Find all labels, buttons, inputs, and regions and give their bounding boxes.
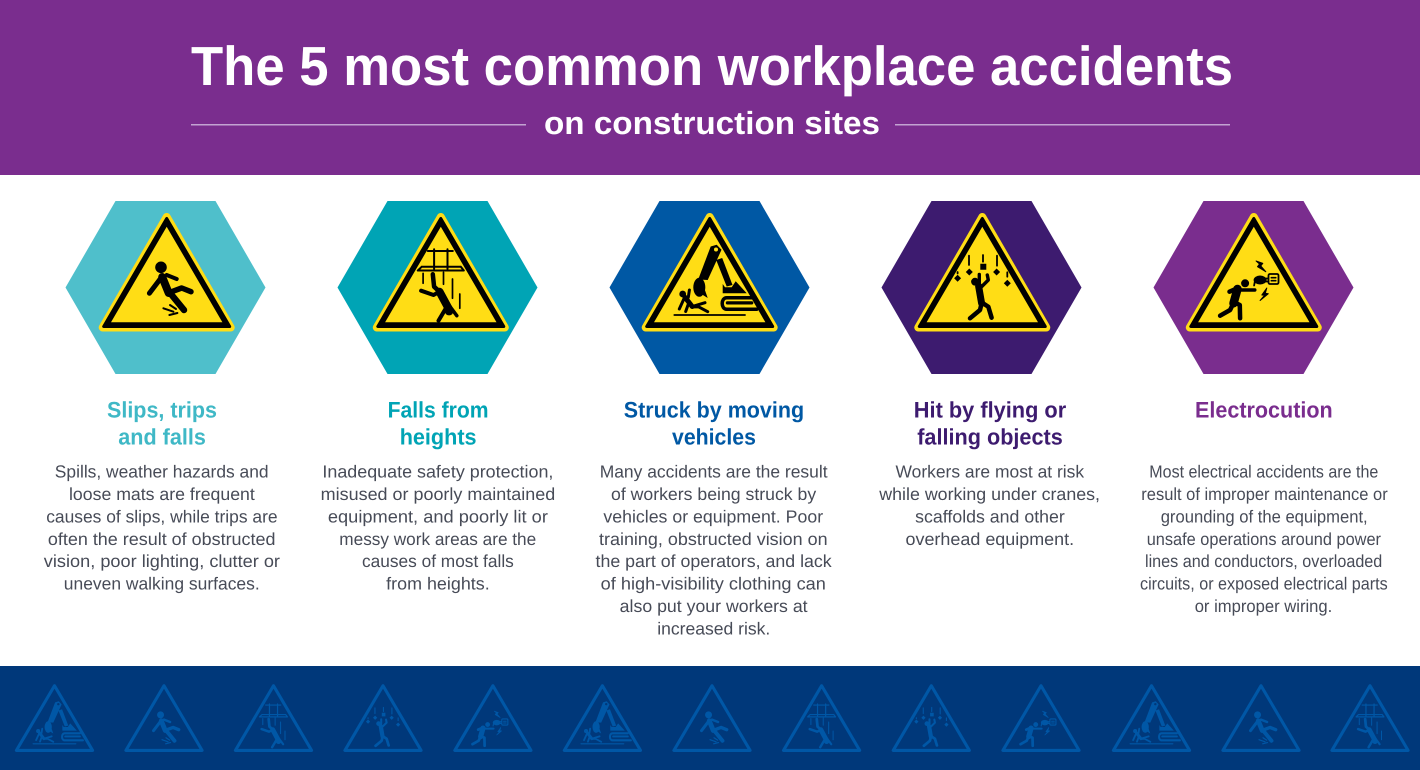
panel: slips, trips and falls [44, 201, 280, 594]
title: The 5 most common workplace accidents [191, 35, 1233, 97]
text: falls description: messy work areas are the [339, 529, 536, 549]
icon: fall hazard hexagon sign [338, 201, 538, 374]
heading: struck: vehicles [672, 424, 756, 450]
panel: hit by flying or falling objects [878, 201, 1100, 549]
text: struck description: training, obstructed vision on [599, 529, 828, 549]
text: slips description: often the result of obstructed [48, 529, 276, 549]
subtitle: on construction sites [544, 105, 880, 141]
text: electrocution description: lines and conductors, overloaded [1145, 551, 1382, 571]
text: slips description: Spills, weather hazards and [55, 462, 269, 482]
header band [0, 0, 1420, 175]
panel: falls from heights [321, 201, 555, 594]
text: struck description [596, 462, 832, 638]
text: slips description: causes of slips, while trips are [46, 506, 278, 526]
text: flying objects description: scaffolds and other [915, 506, 1065, 526]
text: electrocution description [1140, 462, 1388, 616]
text: electrocution description: circuits, or exposed electrical parts [1140, 574, 1388, 594]
text: struck description: of workers being struck by [611, 484, 816, 504]
heading: flying objects: Hit by flying or [914, 398, 1066, 423]
icon: falling objects hexagon sign [882, 201, 1082, 374]
text: struck description: the part of operators, and lack [596, 551, 832, 571]
text: struck description: increased risk. [657, 618, 770, 638]
text: electrocution description: Most electrical accidents are the [1149, 462, 1378, 482]
text: flying objects description: overhead equipment. [906, 529, 1074, 549]
text: slips description: uneven walking surfaces. [64, 574, 260, 594]
heading: struck: Struck by moving [624, 398, 804, 423]
text: struck description: also put your workers at [620, 596, 808, 616]
text: falls description: misused or poorly maintained [321, 484, 555, 504]
heading: slips: and falls [118, 424, 206, 450]
text: falls description [321, 462, 555, 594]
text: electrocution description: or improper wiring. [1195, 596, 1332, 616]
text: flying objects description: Workers are most at risk [896, 462, 1084, 482]
text: electrocution description: result of improper maintenance or [1141, 484, 1388, 504]
heading: slips: Slips, trips [107, 398, 217, 423]
text: flying objects description [878, 462, 1100, 549]
text: falls description: from heights. [386, 574, 490, 594]
heading: falls: Falls from [388, 398, 489, 423]
text: struck description: of high-visibility clothing can [601, 574, 826, 594]
heading: falls: heights [400, 424, 477, 450]
text: struck description: vehicles or equipment. Poor [603, 506, 823, 526]
heading: flying objects: falling objects [917, 424, 1063, 450]
icon: slip hazard hexagon sign [66, 201, 266, 374]
text: flying objects description: while working under cranes, [878, 484, 1100, 504]
icon: excavator hazard hexagon sign [610, 201, 810, 374]
text: struck description: Many accidents are the result [600, 462, 828, 482]
text: falls description: causes of most falls [362, 551, 514, 571]
footer band with hazard icon pattern [0, 666, 1420, 770]
heading: struck [624, 398, 804, 450]
panel: struck by moving vehicles [596, 201, 832, 638]
heading: electrocution: Electrocution [1195, 398, 1333, 423]
text: electrocution description: grounding of the equipment, [1161, 506, 1368, 526]
icon: electric hazard hexagon sign [1154, 201, 1354, 374]
heading: slips [107, 398, 217, 450]
heading: falls [388, 398, 489, 450]
heading: flying objects [914, 398, 1066, 450]
panel: electrocution [1140, 201, 1388, 616]
text: slips description [44, 462, 280, 594]
text: falls description: equipment, and poorly lit or [328, 506, 548, 526]
text: falls description: Inadequate safety protection, [322, 462, 553, 482]
text: electrocution description: unsafe operations around power [1147, 529, 1381, 549]
text: slips description: vision, poor lighting, clutter or [44, 551, 280, 571]
text: slips description: loose mats are frequent [69, 484, 255, 504]
